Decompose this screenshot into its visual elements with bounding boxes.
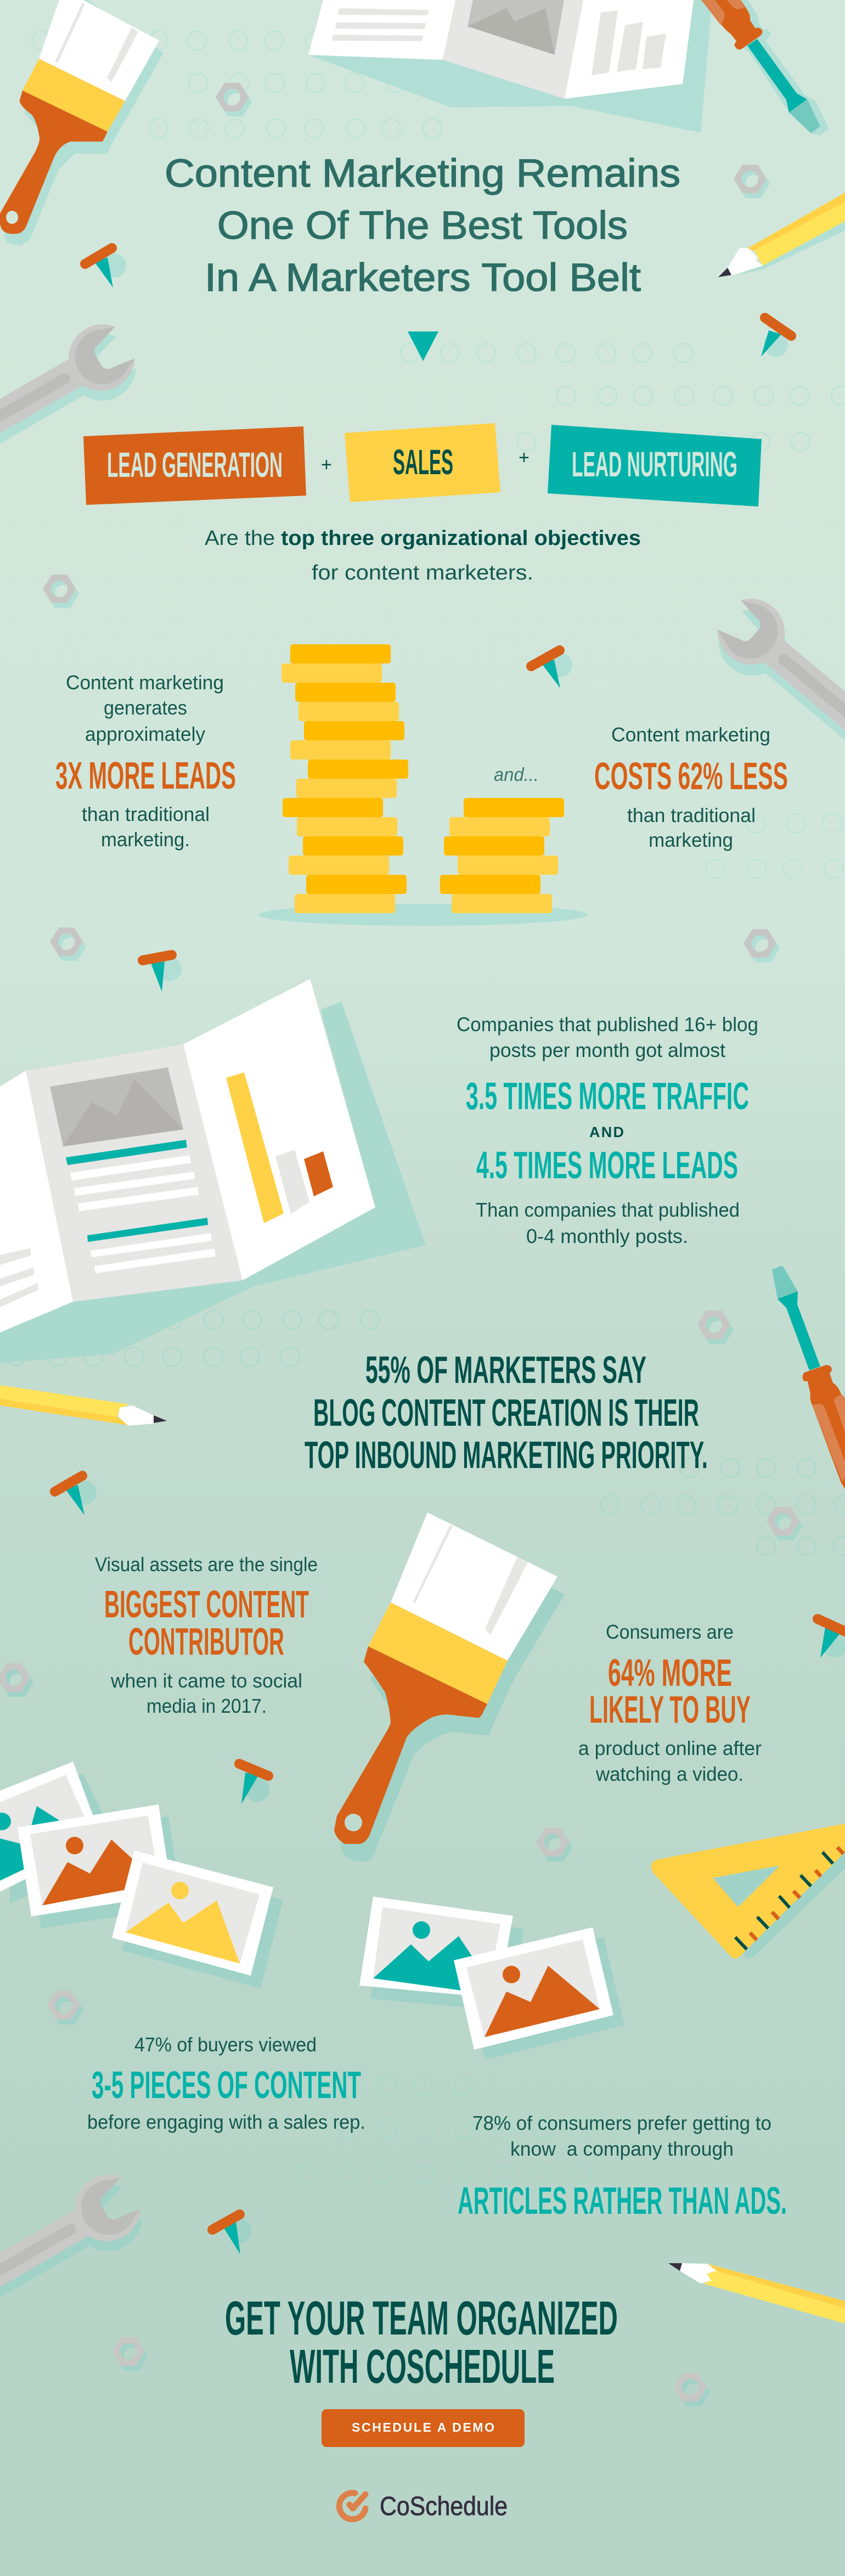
box: sales: SALES [393,442,453,482]
icon: pencil bottom right [668,2263,845,2324]
text: 3x more leads [55,671,236,851]
short coin stack [440,798,564,913]
illustration: photos centre [359,1897,624,2060]
icon: pin 6 [818,1619,845,1658]
photo: yellow [112,1851,283,1988]
photo: teal [0,1762,122,1904]
text: objectives [205,527,641,584]
icon: pin 7 [239,1764,269,1804]
icon: pin 3 [531,650,572,688]
text: blog traffic stats: posts per month got almost [489,1039,725,1061]
text: and: and... [494,764,539,785]
plus: + [519,447,529,468]
text: costs 62% less: Content marketing [611,723,770,746]
document text lines left [0,1248,38,1307]
heading: call to action: WITH COSCHEDULE [290,2340,555,2393]
icon: large paint brush [334,1512,565,1861]
icon: wrench left [0,315,144,488]
coin shadow [258,904,588,926]
title: In A Marketers Tool Belt [205,256,641,300]
icon: paint brush top left [0,0,164,246]
icon: pin 1 [85,248,126,288]
heading: 55% of marketers: 55% OF MARKETERS SAY [365,1348,646,1391]
text: 3x more leads: marketing. [101,828,190,851]
text: 3-5 pieces of content: before engaging with a sales rep. [87,2111,365,2133]
text: objectives: for content marketers. [312,561,533,584]
text: blog traffic stats: Companies that published 16+ blog [457,1013,758,1036]
icon: pin 2 [761,318,791,357]
text: articles rather than ads: 78% of consumers prefer getting to [472,2112,771,2134]
chart: coin stacks [258,644,588,926]
icon: pencil middle left [0,1385,167,1426]
icon: pin 4 [143,955,182,992]
icon: ruler [651,1824,845,1959]
document picture [50,1067,183,1146]
text: blog traffic stats: Than companies that published [476,1199,740,1221]
photo: teal [359,1897,524,2011]
text: 3x more leads: generates [104,696,187,719]
text: biggest content contributor: CONTRIBUTOR [128,1620,284,1663]
text: biggest content contributor [95,1553,318,1717]
heading: call to action [225,2292,618,2393]
text: 3x more leads: approximately [85,723,205,745]
icon: pencil top right [718,193,845,277]
box: lead nurturing [548,425,762,507]
text: costs 62% less [594,723,788,851]
text: blog traffic stats [457,1013,758,1247]
logo wordmark: CoSchedule [380,2492,508,2521]
illustration: photos left [0,1762,283,1988]
text: objectives: Are the top three organizational objectives [205,527,641,550]
icon: screwdriver top right [701,0,829,136]
text: costs 62% less: than traditional [627,804,756,826]
text: 64% more likely: Consumers are [606,1621,734,1643]
icon: pin 5 [55,1476,97,1515]
illustration: document top [308,0,712,133]
heading: 55% of marketers [305,1348,708,1476]
tall coin stack [281,644,408,913]
text: blog traffic stats: AND [589,1124,624,1140]
box: lead generation [83,426,306,505]
text: 3-5 pieces of content [87,2033,365,2133]
illustration: open document [0,979,426,1363]
text: blog traffic stats: 0-4 monthly posts. [526,1225,688,1247]
photo: orange [18,1804,182,1928]
brush shadow [341,1530,565,1861]
arrow: teal triangle [408,331,438,361]
button: schedule a demo [322,2409,525,2447]
document bar chart [226,1072,333,1223]
text: 64% more likely [578,1621,762,1785]
text: biggest content contributor: media in 2017. [147,1695,267,1717]
text: costs 62% less: marketing [649,829,733,851]
text: 3x more leads: 3X MORE LEADS [55,754,236,797]
text: 3x more leads: than traditional [82,803,210,825]
text: 64% more likely: 64% MORE [608,1651,732,1694]
icon: wrench right [708,588,845,787]
icon: wrench bottom left [0,2166,150,2339]
text: 3-5 pieces of content: 3-5 PIECES OF CONTENT [92,2063,361,2106]
button: schedule a demo: SCHEDULE A DEMO [352,2420,494,2434]
objectives row [83,423,762,507]
document shadow [0,1002,426,1363]
logo: CoSchedule [339,2492,508,2521]
text: articles rather than ads: know a company through [510,2138,734,2160]
photo: orange [454,1927,624,2060]
icon: pin 8 [212,2214,252,2254]
plus: + [321,454,332,475]
title [165,152,680,300]
box: sales [345,423,500,502]
text: 64% more likely: watching a video. [595,1763,743,1785]
text: biggest content contributor: BIGGEST CONTENT [104,1583,309,1626]
box: lead generation: LEAD GENERATION [107,445,283,485]
text: biggest content contributor: when it came to social [110,1669,302,1692]
text: 3-5 pieces of content: 47% of buyers viewed [134,2033,317,2056]
text: biggest content contributor: Visual assets are the single [95,1553,318,1576]
text: articles rather than ads [458,2112,787,2222]
document text lines [66,1140,216,1273]
document pages [0,979,375,1332]
logo icon [339,2493,365,2519]
text: 3x more leads: Content marketing [66,671,224,694]
text: 64% more likely: a product online after [578,1737,762,1759]
icon: screwdriver middle right [772,1265,845,1489]
title: One Of The Best Tools [217,204,628,248]
title: Content Marketing Remains [165,152,680,195]
